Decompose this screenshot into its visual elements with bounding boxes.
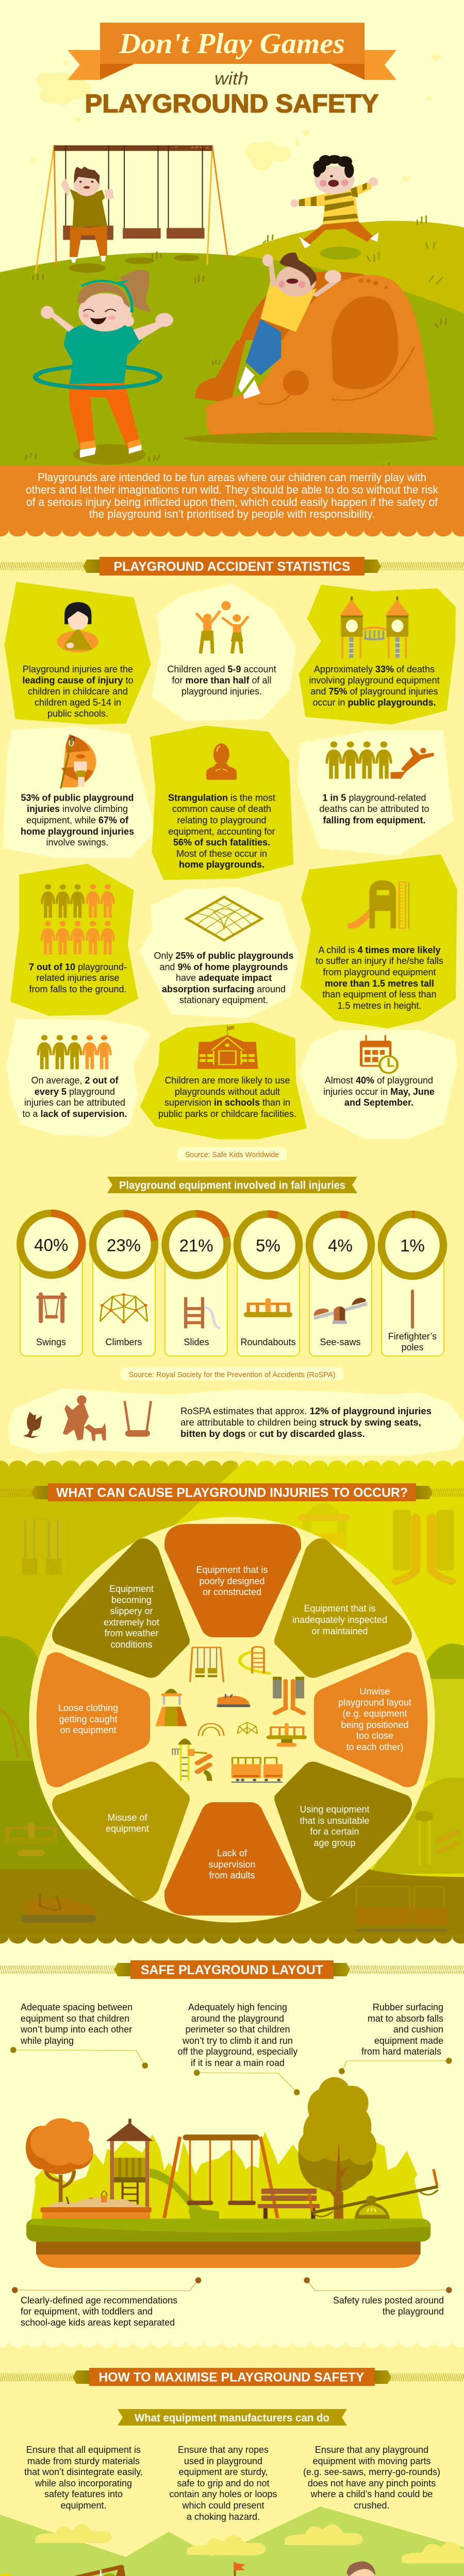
text: safety rules: Safety rules posted around — [333, 2295, 444, 2306]
donut: 40 percent — [20, 1213, 82, 1275]
text: rubber surfacing — [361, 2002, 443, 2057]
intro band: of a serious injury being inflicted upon them, which could easily happen if the safety of — [26, 496, 438, 509]
icon: head and shoulders — [206, 743, 237, 780]
petal: slippery or hot: from weather — [104, 1628, 159, 1638]
panel: seven out of ten: related injuries arise — [36, 973, 120, 983]
panel: one in five falling — [297, 731, 453, 856]
panel: seasonal injuries: Almost 40% of playground — [325, 1075, 433, 1086]
text: sturdy ropes: used in playground — [184, 2456, 262, 2466]
petal: inadequately inspected — [274, 1538, 412, 1678]
icon: roundabout — [244, 1298, 292, 1317]
text: sturdy ropes: Ensure that any ropes — [178, 2445, 269, 2455]
train icon — [231, 1758, 283, 1783]
petal: inadequately inspected: Equipment that is — [304, 1603, 376, 1614]
text: sturdy materials: Ensure that all equipment is — [26, 2445, 141, 2455]
text: high fencing: perimeter so that children — [185, 2024, 290, 2035]
panel: four times more likely — [301, 854, 457, 1028]
text: sturdy ropes: contain any holes or loops — [169, 2489, 277, 2499]
grass tufts lower — [25, 360, 389, 478]
petal: lack of supervision: Lack of — [217, 1848, 247, 1858]
panel: seasonal injuries: injuries occur in May, June — [323, 1087, 435, 1097]
panel: four times more likely: than equipment of less than — [322, 989, 437, 999]
text: sturdy ropes — [169, 2445, 277, 2522]
icon: climbing wall — [61, 734, 96, 788]
panel: seven out of ten: 7 out of 10 playground- — [29, 962, 127, 972]
swing set — [36, 145, 228, 273]
banner: what equipment manufacturers can do: What equipment manufacturers can do — [135, 2412, 329, 2424]
petal: unsuitable equipment: for a certain — [310, 1826, 359, 1837]
panel: schools without supervision: playgrounds without adult — [175, 1087, 280, 1097]
text: sturdy materials: while also incorporating — [35, 2478, 132, 2488]
icon: slide — [184, 1297, 221, 1328]
petal: slippery or hot: conditions — [110, 1639, 153, 1650]
swing icon — [190, 1648, 223, 1682]
arch icon — [198, 1723, 224, 1736]
causes section background — [0, 1461, 464, 1944]
card: firefighter's poles: Firefighter’s — [388, 1331, 437, 1342]
ribbon — [100, 23, 364, 64]
panel: schools without supervision: supervision in schools than in — [164, 1097, 290, 1108]
text: moving parts: Ensure that any playground — [315, 2445, 428, 2455]
petal: lack of supervision: from adults — [209, 1870, 255, 1880]
icon: swing — [36, 1292, 67, 1323]
maximise section background — [0, 2341, 464, 2576]
donut: 23 percent: 23% — [107, 1235, 141, 1255]
text: rubber surfacing: from hard materials — [361, 2046, 441, 2057]
text: sturdy materials: safety features into — [44, 2489, 123, 2499]
chart: causes wheel — [29, 1517, 435, 1923]
panel: strangulation: Most of these occur in — [176, 849, 267, 859]
text: high fencing — [178, 2002, 297, 2068]
icon: surfacing mat grid — [187, 897, 262, 940]
petal: loose clothing — [37, 1652, 150, 1787]
heading: what can cause injuries — [0, 1483, 464, 1501]
source: RoSPA: Source: Royal Society for the Prevention of Accidents (RoSPA) — [129, 1370, 336, 1379]
icon: ten people, seven highlighted — [41, 884, 115, 955]
panel: one in five falling: falling from equipment. — [323, 815, 426, 825]
text: rubber surfacing: Rubber surfacing — [373, 2002, 443, 2012]
petal: slippery or hot: slippery or — [110, 1606, 153, 1616]
panel: climbing and swings — [3, 727, 155, 858]
panel: strangulation: Strangulation is the most — [168, 792, 275, 803]
text: high fencing: Adequately high fencing — [188, 2002, 287, 2012]
donut: 21 percent — [165, 1214, 227, 1276]
chart: equipment percentages — [20, 1213, 444, 1356]
icon: four people and a falling person — [325, 741, 434, 779]
text: moving parts — [303, 2445, 440, 2511]
roundabout icon — [267, 1723, 307, 1747]
text: high fencing: won’t try to climb it and run — [182, 2036, 293, 2046]
playground illustration — [10, 2047, 452, 2293]
text: moving parts: where a child’s hand could be — [310, 2489, 433, 2499]
text: high fencing: around the playground — [191, 2013, 284, 2024]
petal: misuse: equipment — [106, 1824, 149, 1834]
petal: poorly designed — [164, 1524, 301, 1637]
text: high fencing: off the playground, especially — [178, 2046, 297, 2057]
panel: RoSPA estimate: are attributable to children being struck by swing seats, — [180, 1417, 421, 1428]
text: moving parts: crushed. — [354, 2500, 390, 2511]
icon: pole — [411, 1290, 414, 1329]
card: slides: Slides — [184, 1337, 209, 1347]
panel: climbing and swings: 53% of public playground — [21, 792, 134, 803]
card: see-saws: See-saws — [320, 1337, 361, 1347]
panel: leading cause of injury: Playground injuries are the — [23, 664, 133, 674]
panel: impact absorption surfacing: stationary equipment. — [179, 995, 268, 1005]
icon: dog biting child — [63, 1395, 106, 1441]
donut: 5 percent: 5% — [256, 1236, 280, 1255]
panel: children aged 5-9: playground injuries. — [181, 686, 262, 697]
panel: seasonal injuries: and September. — [344, 1097, 413, 1108]
petal: slippery or hot: becoming — [111, 1595, 152, 1605]
icon: calendar and clock — [360, 1036, 397, 1073]
slide shape — [184, 272, 438, 445]
card: firefighter's poles: poles — [401, 1342, 424, 1352]
tower icon — [273, 1677, 304, 1713]
bushes — [0, 2573, 107, 2576]
text: moving parts: equipment with moving parts — [312, 2456, 431, 2466]
panel: children aged 5-9: for more than half of all — [172, 675, 272, 685]
play tower — [106, 2119, 153, 2207]
panel: leading cause of injury — [5, 582, 151, 724]
text: age recommendations — [21, 2295, 177, 2328]
panel: deaths in public playgrounds: involving playground equipment — [309, 675, 440, 685]
panel: leading cause of injury: children aged 5-14 in — [35, 698, 121, 708]
panel: strangulation: home playgrounds. — [179, 859, 264, 870]
manufacturers illustration: park with children — [0, 2506, 464, 2576]
hero illustration: hills, clouds, swing and children — [0, 54, 464, 478]
petal: poorly designed: or constructed — [203, 1587, 261, 1597]
swing set — [164, 2134, 277, 2218]
panel: deaths in public playgrounds: occur in public playgrounds. — [312, 698, 436, 708]
petal: slippery or hot: Equipment — [109, 1584, 154, 1594]
text: rubber surfacing: equipment made — [374, 2036, 443, 2046]
petal: loose clothing: on equipment — [60, 1725, 117, 1735]
icon: school building — [197, 1026, 258, 1069]
hero section — [0, 0, 464, 478]
panel: schools without supervision: Children are more likely to use — [164, 1075, 290, 1086]
panel: lack of supervision: On average, 2 out of — [31, 1075, 119, 1086]
panel: strangulation — [150, 725, 293, 880]
icon: broken glass — [23, 1412, 42, 1438]
panel: climbing and swings: home playground injuries — [21, 826, 134, 837]
intro band — [0, 466, 464, 537]
dome icon — [237, 1722, 257, 1734]
petal: slippery or hot: extremely hot — [104, 1617, 159, 1628]
petal: unwise layout: too close — [356, 1731, 393, 1741]
text: adequate spacing: while playing — [20, 2036, 74, 2046]
text: adequate spacing: equipment so that children — [21, 2013, 129, 2024]
panel: leading cause of injury: public schools. — [47, 708, 108, 719]
panel: climbing and swings: involve swings. — [46, 837, 109, 848]
panel: climbing and swings: equipment, while 67% of — [26, 815, 129, 825]
panel: deaths in public playgrounds: Approximately 33% of deaths — [314, 664, 435, 674]
jumping boy — [290, 155, 379, 248]
front hill — [0, 252, 464, 466]
panel: four times more likely: A child is 4 times more likely — [318, 945, 441, 955]
panel: four times more likely: from playground equipment — [323, 967, 436, 977]
card: see-saws — [309, 1257, 372, 1356]
petal: misuse — [52, 1761, 190, 1901]
text: adequate spacing: won’t bump into each other — [20, 2024, 132, 2035]
panel: impact absorption surfacing: and 9% of home playgrounds — [159, 962, 288, 972]
title — [68, 23, 396, 118]
dome tower icon — [155, 1689, 187, 1726]
donut: 21 percent: 21% — [179, 1236, 213, 1255]
donut: 23 percent — [93, 1214, 155, 1276]
petal: unsuitable equipment — [274, 1761, 412, 1901]
text: safety rules: the playground — [383, 2306, 444, 2316]
grass tufts — [263, 216, 442, 284]
bumper car icon — [217, 1694, 251, 1707]
boy on slide — [347, 2562, 395, 2576]
intro band: Playgrounds are intended to be fun areas where our children can merrily play with — [38, 471, 426, 484]
panel: leading cause of injury: leading cause of injury to — [22, 675, 134, 685]
panel: four times more likely: more than 1.5 metres tall — [325, 978, 434, 989]
faint background equipment — [0, 1503, 457, 1931]
source: Safe Kids Worldwide: Source: Safe Kids Worldwide — [185, 1150, 279, 1159]
text: sturdy ropes: safe to grip and do not — [177, 2478, 270, 2488]
large tree — [299, 2077, 376, 2219]
heading: safe playground layout: SAFE PLAYGROUND LAYOUT — [141, 1963, 323, 1977]
heading: how to maximise playground safety — [0, 2368, 464, 2386]
panel: lack of supervision — [7, 1019, 151, 1136]
clouds — [36, 2524, 464, 2564]
spiral slide icon — [172, 1739, 211, 1781]
text: adequate spacing — [20, 2002, 132, 2046]
boy on slide — [238, 252, 342, 399]
base: layered ground — [26, 2218, 430, 2268]
ribbon tails — [68, 50, 396, 80]
petal: slippery or hot — [52, 1538, 190, 1678]
panel: one in five falling: 1 in 5 playground-related — [322, 792, 426, 803]
swing set and boy — [27, 2567, 145, 2576]
panel: impact absorption surfacing: have adequate impact — [176, 973, 272, 983]
slide — [150, 2168, 219, 2219]
back hill — [234, 221, 464, 347]
panel: RoSPA estimate: RoSPA estimates that approx. 12% of playground injuries — [180, 1405, 432, 1416]
intro band: others and let their imaginations run wild. They should be able to do so without the risk — [26, 483, 439, 496]
title main line: PLAYGROUND SAFETY — [85, 89, 378, 118]
icon: swing seat — [125, 1401, 151, 1437]
text: sturdy ropes: equipment are sturdy, — [179, 2467, 268, 2477]
card: climbers: Climbers — [105, 1337, 142, 1347]
card: slides — [165, 1257, 227, 1356]
background trees — [31, 2131, 423, 2219]
panel: leading cause of injury: children in childcare and — [28, 686, 128, 697]
panel: RoSPA estimate: bitten by dogs or cut by discarded glass. — [180, 1428, 365, 1439]
icon: twin playground towers — [340, 597, 409, 658]
card: roundabouts — [237, 1257, 300, 1356]
card: roundabouts: Roundabouts — [240, 1337, 296, 1347]
text: sturdy ropes: a choking hazard. — [187, 2512, 260, 2522]
text: sturdy materials: that won’t disintegrate easily, — [24, 2467, 143, 2477]
panel: RoSPA estimate — [8, 1388, 464, 1455]
panel: strangulation: relating to playground — [177, 815, 267, 825]
card: swings — [20, 1257, 82, 1356]
text: high fencing: if it is near a main road — [191, 2058, 285, 2068]
text: safety rules — [333, 2295, 444, 2316]
panel: children aged 5-9 — [152, 583, 296, 721]
text: age recommendations: for equipment, with toddlers and — [21, 2306, 153, 2316]
panel: impact absorption surfacing: absorption surfacing around — [162, 984, 286, 994]
boy on swing — [61, 166, 114, 263]
petal: unwise layout: to each other) — [346, 1742, 404, 1752]
orange tree — [26, 2119, 93, 2219]
banner: playground equipment involved in fall injuries: Playground equipment involved in fall injuries — [119, 1180, 345, 1191]
text: sturdy ropes: which could present — [181, 2500, 264, 2511]
callout lines — [13, 2050, 449, 2092]
heading: safe playground layout — [0, 1960, 464, 1979]
petal: misuse: Misuse of — [107, 1812, 148, 1823]
statistics background — [0, 536, 464, 1468]
panel: schools without supervision — [140, 1022, 307, 1140]
petal: unwise layout: (e.g. equipment — [342, 1708, 407, 1719]
bench — [258, 2189, 320, 2219]
card: firefighter's poles — [382, 1257, 444, 1356]
panel: schools without supervision: public parks or childcare facilities. — [158, 1109, 296, 1119]
heading: playground accident statistics — [0, 557, 464, 575]
intro band: the playground isn’t prioritised by people with responsibility. — [89, 507, 375, 520]
text: adequate spacing: Adequate spacing between — [21, 2002, 132, 2012]
panel: strangulation: common cause of death — [172, 804, 271, 814]
text: age recommendations: school-age kids areas kept separated — [21, 2317, 175, 2328]
panel: lack of supervision: every 5 playground — [35, 1087, 115, 1097]
panel: deaths in public playgrounds: and 75% of playground injuries — [310, 686, 438, 697]
sandbox — [41, 2191, 152, 2219]
icon: slide with height ruler — [347, 880, 409, 928]
banner: playground equipment involved in fall injuries — [107, 1177, 357, 1193]
panel: four times more likely: 1.5 metres in height. — [337, 1001, 422, 1011]
petal: loose clothing: Loose clothing — [58, 1703, 118, 1713]
source: Safe Kids Worldwide — [177, 1147, 287, 1160]
petal: loose clothing: getting caught — [59, 1714, 118, 1724]
icon: dome climber — [100, 1293, 147, 1324]
heading: how to maximise playground safety: HOW TO MAXIMISE PLAYGROUND SAFETY — [99, 2370, 364, 2384]
text: sturdy materials: equipment. — [60, 2500, 107, 2511]
petal: unwise layout — [314, 1652, 427, 1787]
petal: inadequately inspected: or maintained — [311, 1626, 368, 1636]
icon: five people, two highlighted — [37, 1035, 112, 1069]
panel: four times more likely: to suffer an injury if he/she falls — [316, 956, 443, 966]
donut: 5 percent — [237, 1214, 299, 1276]
text: moving parts: (e.g. see-saws, merry-go-rounds) — [303, 2467, 440, 2477]
text: rubber surfacing: and cushion — [393, 2024, 443, 2035]
shadows on the grass — [69, 255, 199, 273]
icons: central playground equipment — [155, 1647, 307, 1783]
source: RoSPA — [121, 1367, 343, 1380]
sandbox with boat — [166, 2563, 312, 2576]
donut: 4 percent — [309, 1214, 371, 1276]
panel: seasonal injuries — [299, 1030, 457, 1139]
slide icon — [240, 1647, 271, 1673]
petal: unsuitable equipment: Using equipment — [300, 1804, 370, 1815]
panel: seven out of ten: from falls to the ground. — [29, 984, 127, 994]
text: sturdy materials — [24, 2445, 143, 2511]
petal: unwise layout: being positioned — [341, 1720, 409, 1730]
panel: children aged 5-9: Children aged 5-9 account — [167, 664, 276, 674]
title small line: with — [214, 69, 248, 89]
banner: what equipment manufacturers can do — [118, 2409, 347, 2426]
donut: 1 percent — [382, 1214, 443, 1276]
icon: see-saw — [313, 1298, 368, 1324]
panel: strangulation: equipment, accounting for — [168, 826, 275, 837]
text: age recommendations: Clearly-defined age recommendations — [21, 2295, 177, 2306]
panel: strangulation: 56% of such fatalities. — [173, 837, 270, 848]
safe layout background — [0, 1944, 464, 2341]
petal: unsuitable equipment: that is unsuitable — [300, 1816, 370, 1826]
petal: unwise layout: Unwise — [359, 1686, 390, 1697]
petal: unwise layout: playground layout — [338, 1697, 411, 1707]
text: sturdy materials: made from sturdy materials — [27, 2456, 140, 2466]
heading: playground accident statistics: PLAYGROUND ACCIDENT STATISTICS — [113, 560, 351, 574]
petal: poorly designed: poorly designed — [199, 1576, 265, 1586]
panel: impact absorption surfacing — [139, 887, 299, 1019]
mountains — [0, 2506, 464, 2576]
petal: inadequately inspected: inadequately inspected — [292, 1615, 387, 1625]
donut: 4 percent: 4% — [328, 1236, 353, 1255]
donut: 1 percent: 1% — [400, 1236, 425, 1255]
heading: what can cause injuries: WHAT CAN CAUSE PLAYGROUND INJURIES TO OCCUR? — [56, 1486, 408, 1500]
petal: lack of supervision: supervision — [208, 1859, 256, 1870]
panel: deaths in public playgrounds — [299, 585, 456, 724]
panel: impact absorption surfacing: Only 25% of public playgrounds — [154, 951, 294, 961]
panel: seven out of ten — [10, 864, 138, 1016]
card: climbers — [93, 1257, 155, 1356]
text: rubber surfacing: mat to absorb falls — [368, 2013, 443, 2024]
panel: lack of supervision: to a lack of supervision. — [22, 1109, 127, 1119]
petal: poorly designed: Equipment that is — [196, 1565, 268, 1575]
donut: 40 percent: 40% — [34, 1235, 68, 1255]
girl with hula hoop — [36, 270, 173, 465]
text: moving parts: does not have any pinch points — [308, 2478, 436, 2488]
petal: unsuitable equipment: age group — [313, 1838, 356, 1848]
icon: two children with ball — [197, 601, 247, 652]
panel: one in five falling: deaths can be attributed to — [319, 804, 429, 814]
petal: lack of supervision — [164, 1802, 301, 1916]
card: swings: Swings — [36, 1337, 66, 1347]
see-saw — [309, 2169, 438, 2219]
icon: child with arm sling — [57, 602, 98, 652]
title script line: Don't Play Games — [119, 28, 345, 60]
panel: lack of supervision: injuries can be attributed — [24, 1097, 125, 1108]
clouds — [30, 54, 441, 181]
panel: climbing and swings: injuries involve climbing — [27, 804, 128, 814]
